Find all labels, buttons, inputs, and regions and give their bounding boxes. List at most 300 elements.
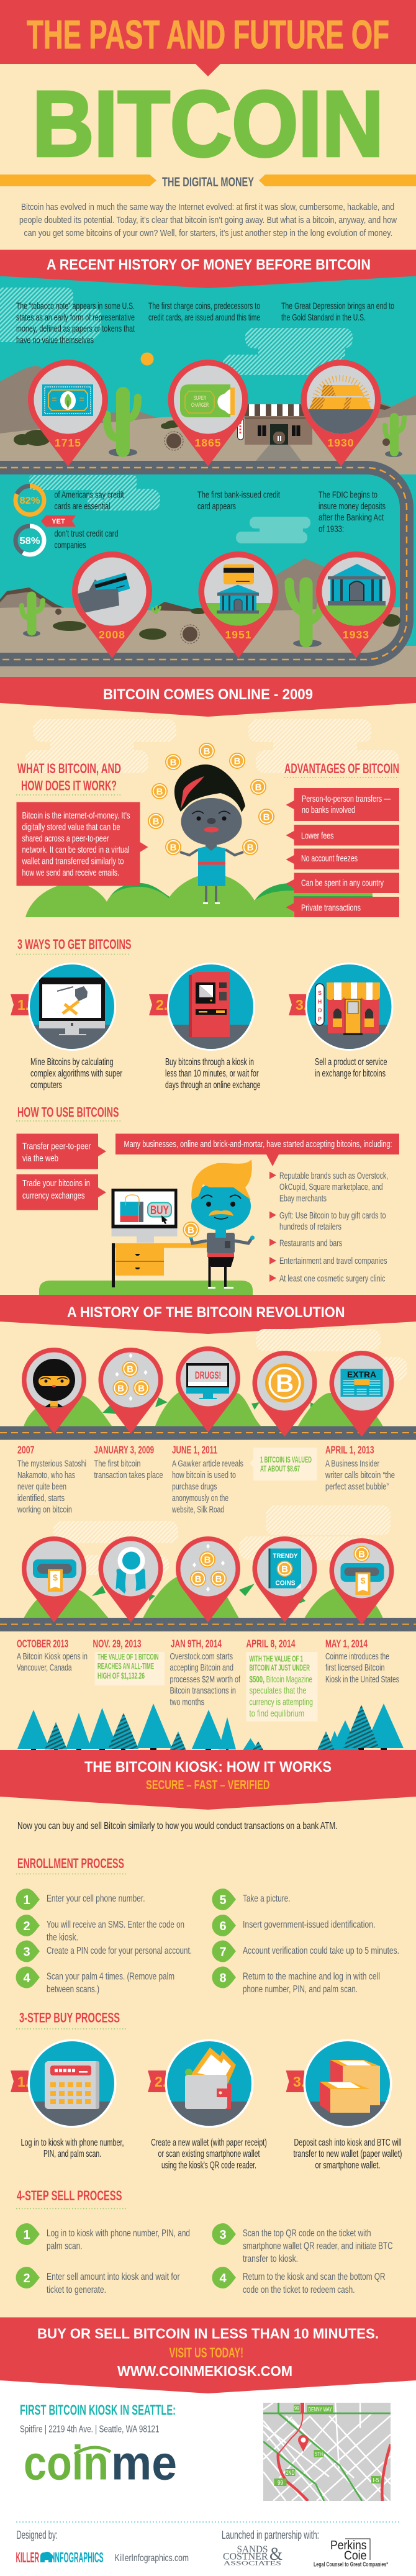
timeline text: november 2013: HIGH OF $1,132.26 [97,1671,145,1680]
timeline text: january 3 2009: transaction takes place [94,1470,163,1481]
timeline text: january 3 2009: The first bitcoin [94,1458,140,1469]
timeline text: january 9 2014: Bitcoin transactions in [170,1685,236,1696]
timeline text: april 1 2013: writer calls bitcoin “the [325,1470,395,1481]
pin: january 2009 coins [99,1348,163,1434]
list: advantages: Lower fees [301,831,334,841]
steps: enrollment: the kiosk. [47,1933,78,1943]
background: white footer [0,2380,416,2576]
timeline text: may 1 2014: MAY 1, 2014 [325,1637,368,1649]
timeline text: june 1 2011: anonymously on the [172,1493,228,1503]
list: advantages: No account freezes [301,853,358,864]
callout: transfer peer-to-peer: via the web [22,1153,58,1164]
hills: timeline row one [24,1388,383,1426]
banner: a recent history: A RECENT HISTORY OF MONEY BEFORE BITCOIN [47,256,371,273]
way 3: shop: in exchange for bitcoins [315,1068,386,1079]
icon: coin into slot: B [358,1549,365,1560]
timeline text: october 2013 [17,1637,88,1673]
stat: 58 percent: 58% [20,536,40,546]
pin: value coin [253,1351,317,1437]
icon: three coins: B [195,1574,202,1585]
banner: bitcoin comes online [0,677,416,717]
callout: bitcoin definition: how we send and receive emails. [22,868,119,878]
desk [112,1243,207,1287]
clouds: what is bitcoin [25,719,399,773]
callout: trade bitcoins [16,1174,106,1210]
timeline text: 2007: identified, starts [17,1493,65,1503]
list: advantages: no banks involved [302,805,355,815]
logo: sands costner: & [269,2544,283,2564]
text: fdic: of 1933: [319,524,344,534]
icon: coins: B [263,812,270,822]
icon: trendy coins book: COINS [276,1580,296,1587]
callout: bitcoin definition: wallet and transferred similarly to [22,856,124,867]
pin: 2008 [72,551,152,658]
icon: card over bank [206,564,271,626]
steps: sell: transfer to kiosk. [243,2254,298,2264]
buy step 2: wallet: or scan existing smartphone wallet [158,2149,260,2159]
text: tobacco note: states as an early form of representative [16,312,135,323]
timeline text: april 1 2013 [325,1443,395,1492]
callout: trade bitcoins: Trade your bitcoins in [22,1178,90,1189]
way 2: kiosk: days through an online exchange [165,1080,261,1091]
map: DENNY WAY [308,2406,332,2413]
steps: enrollment: Enter your cell phone number. [47,1893,145,1904]
buy step 2: wallet [148,2039,267,2171]
icon: ninja [33,1359,75,1407]
buy step 3: cash stacks [286,2039,402,2171]
steps: enrollment: 7 [219,1945,227,1959]
timeline text: november 2013: REACHES AN ALL-TIME [97,1662,154,1671]
icon: coins: B [247,842,254,853]
header banner [0,0,416,76]
icon: storefront: H [318,999,322,1005]
steps: enrollment: phone number, PIN, and palm scan. [243,1984,358,1995]
buy step 2: wallet: using the kiosk's QR code reader. [161,2160,256,2171]
icon: coin into slot: $ [361,1576,366,1585]
logo: perkins coie: Legal Counsel to Great Companies* [314,2561,388,2569]
cactus 1 [107,394,138,456]
pin: june 2011 drugs monitor [176,1346,240,1433]
icon: cash slot: $ [53,1572,58,1582]
timeline text: november 2013: NOV. 29, 2013 [93,1637,142,1649]
logo: sands costner: ASSOCIATES [224,2560,281,2566]
callout: bitcoin valued: AT ABOUT $8.67 [260,1464,300,1473]
timeline text: april 8 2014: speculates that the [250,1685,307,1696]
sun [140,353,154,365]
text: bank-issued card [197,489,281,512]
steps: enrollment: 8 [219,1971,227,1985]
text: charge coins: The first charge coins, predecessors to [148,301,260,312]
icon: award ribbon [115,1547,145,1594]
buy step 2: wallet: Create a new wallet (with paper receipt) [151,2138,267,2148]
credits: launched in partnership [222,2529,388,2569]
monitor [112,1189,178,1243]
icon: three coins [113,1353,149,1401]
small cloud [236,517,310,543]
way 2: kiosk [149,963,261,1091]
icon: banknote [42,384,93,416]
banner: bitcoin kiosk [0,1750,416,1810]
timeline text: may 1 2014: first licensed Bitcoin [325,1662,385,1673]
icon: three coins: B [117,1384,124,1394]
cactus 5 [153,605,160,614]
text: tobacco note: money, defined as papers or tokens that [16,324,135,334]
pin: 1951 [199,551,278,658]
storefront [237,404,312,445]
steps: enrollment: 6 [219,1920,227,1933]
icon: storefront [311,982,387,1049]
cactus 2 [385,417,404,457]
steps: sell: 1 [23,2228,30,2242]
icon: cash stacks [309,2060,386,2126]
hills: behind woman [25,874,373,917]
kiosk location [20,2402,176,2434]
text: tobacco note [16,301,135,345]
steps: sell [16,2223,392,2295]
icon: storefront: P [318,1016,322,1022]
heading: what is bitcoin: HOW DOES IT WORK? [21,778,117,794]
heading: how to use bitcoins: HOW TO USE BITCOINS [17,1104,119,1120]
timeline text: 2007: The mysterious Satoshi [17,1458,86,1469]
icon: bank [325,564,387,626]
monitor: BUY [150,1204,169,1217]
logo: perkins coie: Perkins [330,2539,366,2552]
timeline text: june 1 2011: A Gawker article reveals [172,1458,243,1469]
icon: wallet with bills [171,2048,247,2126]
icon: storefront: O [317,1007,322,1014]
pin: 1933: 1933 [343,628,369,641]
pin: 1715: 1715 [55,437,81,449]
way 3: shop: Sell a product or service [315,1057,387,1068]
icon: three coins: B [127,1364,133,1375]
banner: bitcoin comes online: BITCOIN COMES ONLINE - 2009 [103,686,313,703]
steps: enrollment: 1 [23,1893,30,1907]
map: 99 [294,2405,299,2412]
callout: transfer peer-to-peer: Transfer peer-to-peer [22,1141,91,1151]
timeline text: april 8 2014: APRIL 8, 2014 [246,1637,296,1649]
way 3: shop: 3. [296,997,307,1013]
man: B [188,1225,194,1236]
steps: enrollment: Scan your palm 4 times. (Remove palm [47,1971,174,1982]
buy step 3: cash stacks: or smartphone wallet. [315,2160,380,2171]
buy step 1: keypad [11,2039,124,2159]
buy step 1: keypad: 1. [17,2074,29,2090]
title: bitcoin: BITCOIN [32,71,384,176]
subtitle ribbon: the digital money: THE DIGITAL MONEY [162,175,254,189]
timeline text: october 2013: Vancouver, Canada [17,1662,72,1673]
pin: 1930 [301,360,381,466]
timeline text: october 2013: OCTOBER 2013 [17,1637,68,1649]
steps: enrollment: 2 [23,1920,30,1933]
pin: 1930: 1930 [328,437,354,449]
steps: enrollment [16,1889,399,1995]
road: timeline row one [0,1426,416,1440]
list: merchants [269,1171,388,1284]
text: fdic: after the Banking Act [319,512,384,523]
way 2: kiosk: Buy bitcoins through a kiosk in [165,1057,254,1068]
pin: 1951: 1951 [225,628,251,641]
timeline text: january 3 2009 [94,1443,163,1481]
timeline text: april 1 2013: A Business Insider [325,1458,379,1469]
icon: newspaper: EXTRA [347,1369,376,1379]
icon: monitor: DRUGS! [195,1369,221,1381]
timeline text: june 1 2011: how bitcoin is used to [172,1470,236,1481]
intro paragraph [19,202,397,238]
way 1: mining: computers [30,1080,62,1091]
steps: sell: palm scan. [47,2241,82,2252]
text: great depression: the Gold Standard in the U.S. [281,312,366,323]
man [183,1159,255,1289]
timeline text: 2007: never quite been [17,1482,66,1492]
stat: 82 percent: of Americans say credit [55,489,124,501]
stat: 58 percent: don't trust credit card [55,528,118,539]
map [263,2403,391,2503]
logo: coinme: coin [24,2436,109,2490]
steps: sell: 3 [219,2228,227,2242]
icon: trendy coins book: TRENDY [273,1553,298,1560]
text: bank-issued card: The first bank-issued credit [197,489,281,501]
icon: three coins: B [204,1555,211,1565]
banner: history of the bitcoin revolution [0,1295,416,1334]
callout: bitcoin definition: digitally stored value that can be [22,822,120,832]
steps: sell: Log in to kiosk with phone number, PIN, and [47,2228,190,2239]
buy step 1: keypad: PIN, and palm scan. [43,2149,101,2159]
stat: 82 percent [16,486,124,514]
timeline text: april 1 2013: APRIL 1, 2013 [325,1443,374,1456]
text: great depression [281,301,394,323]
road: timeline row two [0,1618,416,1631]
timeline text: january 9 2014: two months [170,1697,204,1708]
timeline text: april 8 2014: to find equilibrium [250,1708,304,1719]
icon: coins: B [170,842,177,853]
illustration: man at computer [39,1159,255,1295]
list: advantages: Private transactions [301,903,361,913]
icon: charge coin card [180,384,235,417]
callout: transfer peer-to-peer [16,1134,106,1169]
logo: perkins coie: Coie [344,2549,366,2562]
icon: coins: B [153,816,160,827]
buy step 3: cash stacks: 3. [293,2074,305,2090]
timeline text: june 1 2011: website, Silk Road [171,1504,224,1515]
timeline text: november 2013 [93,1637,165,1685]
banner: a recent history [0,250,416,288]
pin: 1865 [168,360,248,466]
icon: hand holding card [78,573,130,612]
callout: bitcoin definition: Bitcoin is the internet-of-money. It’s [22,810,130,821]
text: bank-issued card: card appears [197,501,236,512]
timeline text: may 1 2014 [325,1637,399,1685]
trees [17,1703,404,1753]
heading: 3 ways to get bitcoins: 3 WAYS TO GET BITCOINS [17,937,132,952]
timeline text: january 9 2014: Overstock.com starts [170,1651,233,1662]
pin: extra newspaper [330,1351,394,1437]
heading: what is bitcoin: WHAT IS BITCOIN, AND [17,761,121,776]
way 1: mining [11,963,122,1091]
steps: enrollment: 5 [219,1893,227,1907]
timeline text: april 8 2014: currency is attempting [250,1697,313,1708]
icon: coin into slot [340,1546,384,1595]
callout: bitcoin definition: network. It can be stored in a virtual [22,845,129,855]
pin: 2008: 2008 [99,628,125,641]
stat: 58 percent [16,526,118,555]
steps: sell: code on the ticket to redeem cash. [243,2285,355,2295]
steps: enrollment: Insert government-issued identification. [243,1920,375,1930]
text: fdic [319,489,386,534]
credits: designed by: INFOGRAPHICS [53,2549,103,2565]
banner: call to action: VISIT US TODAY! [169,2345,243,2361]
timeline text: april 8 2014: BITCOIN AT JUST UNDER [250,1663,310,1672]
timeline text: january 9 2014: JAN 9TH, 2014 [171,1637,222,1649]
timeline text: october 2013: A Bitcoin Kiosk opens in [17,1651,88,1662]
callout: bitcoin definition: shared across a peer-to-peer [22,833,109,844]
stat: 58 percent: companies [55,540,86,550]
buy step 2: wallet: 2. [155,2074,166,2090]
callout: businesses accepting [115,1134,399,1166]
steps: enrollment: between scans.) [47,1984,99,1995]
timeline text: 2007: Nakamoto, who has [17,1470,75,1481]
text: fdic: The FDIC begins to [319,489,378,501]
icon: three coins [190,1544,227,1592]
steps: enrollment: You will receive an SMS. Enter the code on [47,1920,184,1930]
icon: monitor with pickaxe [34,977,111,1049]
text: tobacco note: have no value themselves [16,335,94,345]
icon: three coins: B [215,1574,222,1585]
credits: designed by [16,2529,189,2565]
list: merchants: Restaurants and bars [279,1238,342,1248]
yet ribbon: YET [52,518,65,525]
pin: october 2013 kiosk [22,1536,86,1623]
list: merchants: hundreds of retailers [279,1222,341,1232]
steps: enrollment: 3 [23,1945,30,1959]
clouds [0,288,353,510]
stat: 82 percent: cards are essential [55,501,111,512]
landscape top [0,366,186,447]
stat: 82 percent: 82% [20,496,40,506]
banner: call to action [0,2318,416,2393]
text: fdic: insure money deposits [319,501,386,512]
steps: enrollment: 4 [23,1971,30,1985]
heading: enrollment process: ENROLLMENT PROCESS [17,1856,124,1871]
timeline text: january 9 2014 [170,1637,241,1708]
text: charge coins: credit cards, are issued around this time [148,312,260,323]
timeline text: june 1 2011 [171,1443,243,1515]
icon: three coins: B [138,1384,145,1394]
icon: trendy coins book: B [281,1564,288,1575]
icon: coins: B [234,756,241,766]
timeline text: june 1 2011: purchase drugs [172,1482,217,1492]
way 2: kiosk: less than 10 minutes, or wait for [165,1068,258,1079]
steps: enrollment: Create a PIN code for your personal account. [47,1946,192,1956]
credits: designed by: Designed by: [16,2529,58,2541]
timeline text: january 3 2009: JANUARY 3, 2009 [94,1443,154,1456]
clouds: timeline [53,1329,407,1575]
timeline text: april 1 2013: perfect asset bubble” [325,1482,389,1492]
timeline text: 2007: working on bitcoin [17,1504,72,1515]
logo: sands costner: SANDS [237,2544,268,2555]
map: 5TH [315,2451,323,2458]
map: I-5 [373,2477,379,2484]
banner: bitcoin kiosk: THE BITCOIN KIOSK: HOW IT WORKS [84,1759,332,1776]
timeline text: 2007 [17,1443,86,1515]
pin: 1865: 1865 [195,437,221,449]
pin: november 2013 ribbon [99,1536,163,1623]
icon: coins [148,743,274,855]
icon: large coin: B [276,1370,294,1397]
logo: coinme: me [111,2436,177,2490]
kiosk location: FIRST BITCOIN KIOSK IN SEATTLE: [20,2402,176,2418]
steps: sell: 2 [23,2272,30,2285]
way 1: mining: Mine Bitcoins by calculating [30,1057,113,1068]
callout: bitcoin valued [250,1448,317,1481]
heading: what is bitcoin [16,761,122,795]
character: woman with coins [148,743,274,904]
timeline text: june 1 2011: JUNE 1, 2011 [172,1443,217,1456]
callout: bitcoin definition [16,802,148,886]
steps: sell: ticket to generate. [47,2285,106,2295]
pin: 1933 [316,551,396,658]
timeline text: may 1 2014: Coinme introduces the [325,1651,389,1662]
credits: designed by: KILLER [16,2549,39,2565]
icon: coins: B [156,786,163,797]
buy step 1: keypad: Log in to kiosk with phone number, [21,2138,124,2148]
subtitle ribbon: the digital money [0,175,416,189]
steps: sell: Scan the top QR code on the ticket with [243,2228,371,2239]
credits: launched in partnership: Launched in partnership with: [222,2529,319,2541]
way 2: kiosk: 2. [156,997,168,1013]
bushes [14,420,400,640]
yet ribbon [41,515,76,527]
timeline text: april 8 2014: WITH THE VALUE OF 1 [250,1654,303,1663]
logo: sands costner [223,2544,283,2566]
heading: 3-step buy process: 3-STEP BUY PROCESS [19,2010,120,2026]
timeline text: 2007: 2007 [17,1443,35,1456]
steps: sell: 4 [219,2272,227,2285]
icon: coins: B [204,746,210,756]
timeline text: january 9 2014: accepting Bitcoin and [170,1662,233,1673]
banner: bitcoin kiosk: SECURE – FAST – VERIFIED [146,1778,269,1792]
cactus 4 [289,583,322,647]
pin: january 2014 coins [176,1536,240,1623]
pin: april 2014 book [253,1536,317,1623]
icon: coins: B [170,758,177,768]
icon: storefront: S [318,990,322,996]
timeline text: january 9 2014: processes $2M worth of [170,1674,241,1685]
callout: bitcoin valued: 1 BITCOIN IS VALUED [260,1455,312,1464]
icon: bitcoin kiosk [173,972,250,1049]
way 3: shop [289,963,397,1079]
icon: coins: B [255,782,262,792]
callout: trade bitcoins: currency exchanges [22,1190,84,1201]
landscape bottom [0,558,404,658]
timeline text: april 8 2014: $500, Bitcoin Magazine [250,1674,312,1685]
map: 99 [278,2480,283,2487]
icon: elephant [40,2552,53,2562]
steps: sell: Enter sell amount into kiosk and wait for [47,2272,180,2282]
banner: history of the bitcoin revolution: A HISTORY OF THE BITCOIN REVOLUTION [67,1304,345,1321]
way 1: mining: complex algorithms with super [30,1068,122,1079]
timeline text: november 2013: THE VALUE OF 1 BITCOIN [97,1652,159,1662]
banner: call to action: BUY OR SELL BITCOIN IN LESS THAN 10 MINUTES. [37,2325,379,2341]
road and scenery [0,646,416,677]
hills: timeline row two [24,1576,383,1618]
credits: designed by: KillerInfographics.com [114,2553,189,2564]
heading: 4-step sell process: 4-STEP SELL PROCESS [17,2188,122,2203]
tumbleweeds [55,432,390,643]
logo: sands costner: COSTNER [223,2551,268,2562]
text: tobacco note: The “tobacco note” appears in some U.S. [16,301,135,312]
steps: enrollment: Take a picture. [243,1893,291,1904]
list: advantages: Can be spent in any country [301,878,384,888]
